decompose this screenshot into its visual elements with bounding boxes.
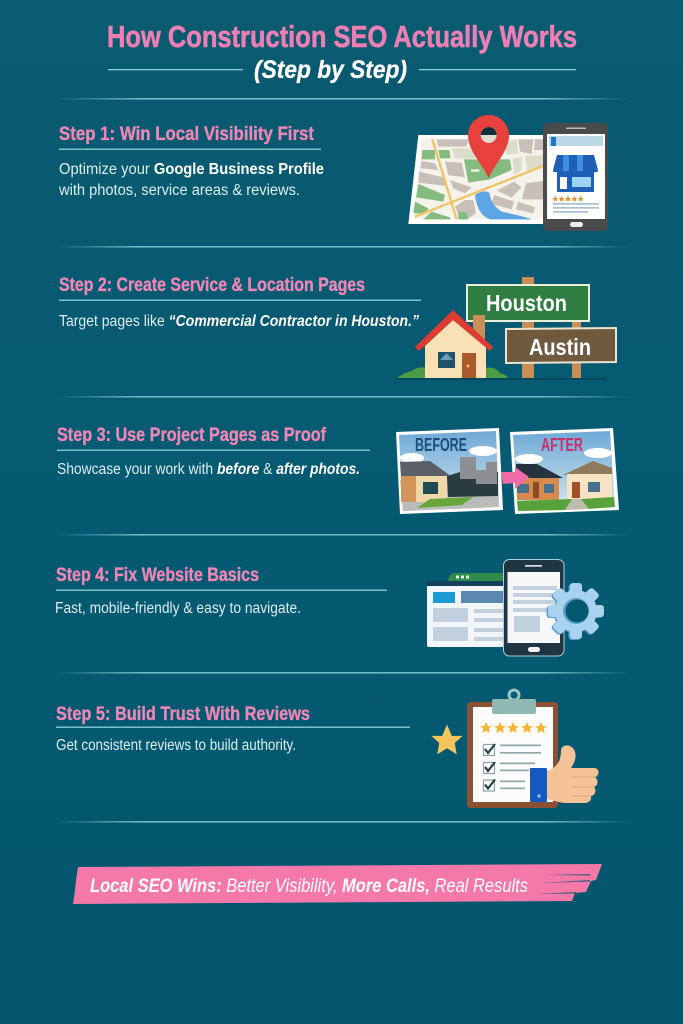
- icon: website window: [427, 573, 504, 647]
- sign: Austin: [506, 328, 616, 363]
- panel: step 5: [56, 690, 599, 808]
- callout banner: [73, 864, 602, 904]
- step 4 heading: Step 4: Fix Website Basics: [56, 565, 259, 586]
- step 1 body: with photos, service areas & reviews.: [58, 182, 300, 199]
- icon: large star: [431, 724, 463, 754]
- subtitle: (Step by Step): [254, 56, 407, 84]
- icon: clipboard with stars: [467, 690, 558, 808]
- icon: phone with storefront: [543, 123, 608, 231]
- callout banner: Local SEO Wins: Better Visibility, More Calls, Real Results: [90, 876, 528, 897]
- title: How Construction SEO Actually Works: [107, 19, 577, 54]
- step 3 heading: Step 3: Use Project Pages as Proof: [57, 425, 327, 446]
- sign: Houston: [467, 285, 589, 321]
- icon: before photo: [396, 428, 503, 514]
- step 5 heading: Step 5: Build Trust With Reviews: [56, 704, 310, 725]
- step 1 body: [58, 161, 324, 199]
- step 1 heading: Step 1: Win Local Visibility First: [59, 124, 315, 145]
- panel: step 2: [59, 275, 616, 380]
- step 4 body: Fast, mobile-friendly & easy to navigate.: [55, 600, 301, 617]
- sign: Houston: Houston: [486, 290, 567, 316]
- step 5 body: Get consistent reviews to build authority.: [56, 737, 296, 754]
- step 2 heading: Step 2: Create Service & Location Pages: [59, 275, 365, 296]
- sign: Austin: Austin: [529, 334, 591, 360]
- step 2 body: Target pages like “Commercial Contractor in Houston.”: [59, 313, 419, 330]
- icon: gear: [546, 583, 604, 640]
- icon: phone: [504, 560, 564, 656]
- step 3 body: Showcase your work with before & after photos.: [57, 461, 360, 478]
- panel: step 1: [58, 115, 608, 231]
- panel: step 4: [55, 560, 604, 656]
- icon: before photo: BEFORE: [415, 435, 467, 455]
- icon: thumbs up hand: [530, 745, 599, 803]
- arrow: before to after: [501, 467, 529, 489]
- icon: map with pin: [408, 115, 550, 224]
- icon: after photo: [510, 428, 619, 514]
- panel: step 3: [57, 425, 619, 514]
- icon: house with city signs: [397, 277, 616, 380]
- step 1 body: Optimize your Google Business Profile: [59, 161, 324, 178]
- icon: after photo: AFTER: [541, 435, 583, 455]
